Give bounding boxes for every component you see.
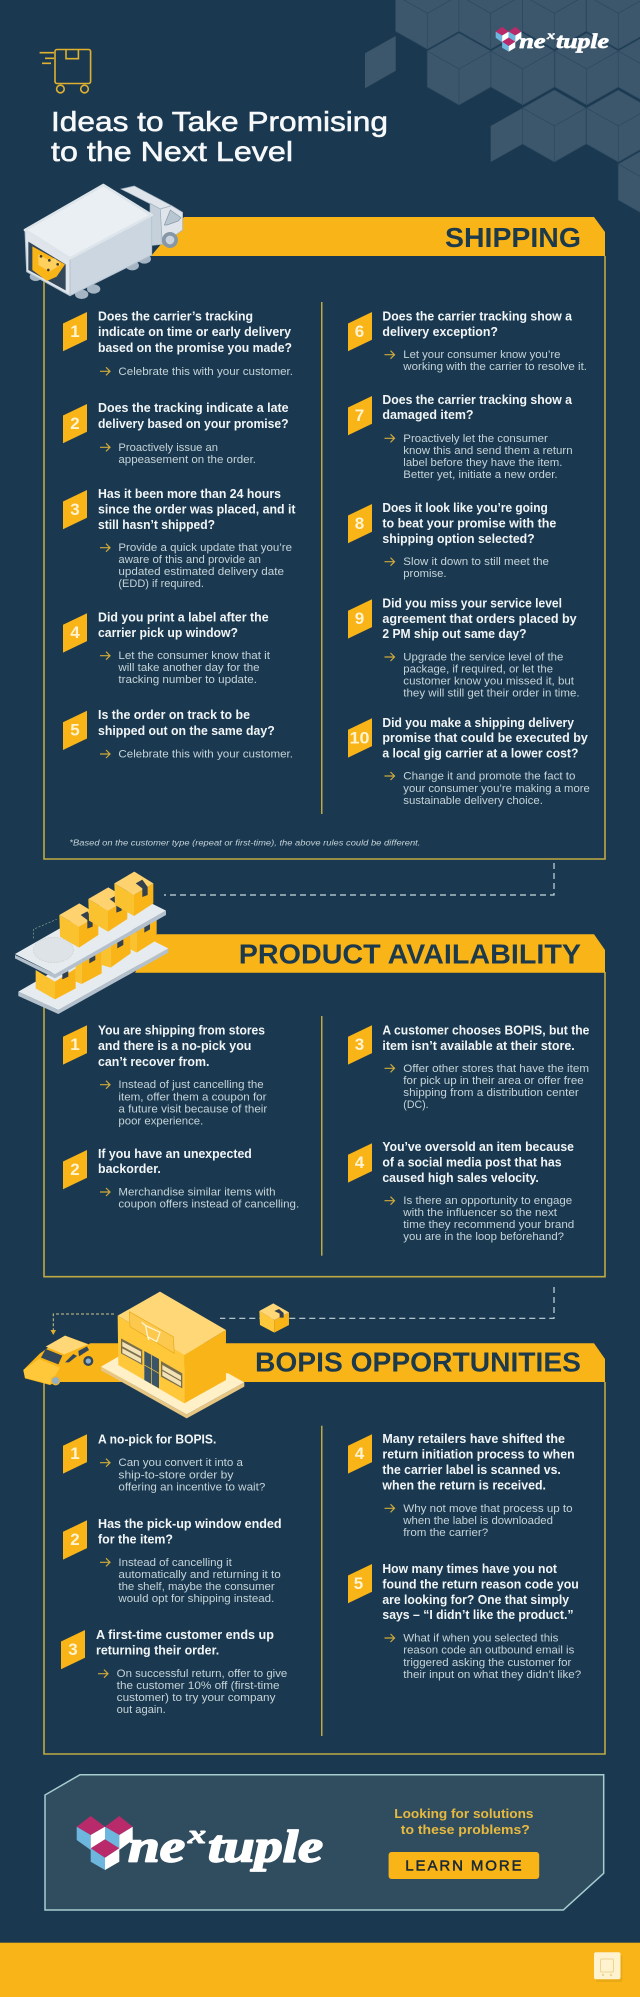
item 3: Has it been more than 24 hours [98,487,281,501]
item 9: they will still get their order in time. [403,688,580,700]
item 4: of a social media post that has [382,1156,562,1170]
item 2 [63,1147,299,1210]
item 1: offering an incentive to wait? [118,1482,265,1494]
item 5: triggered asking the customer for [403,1657,572,1669]
item 5: found the return reason code you [382,1578,579,1592]
panel: product availability [15,872,605,1277]
call to action text [394,1806,534,1837]
item 5: are looking for? One that simply [382,1593,569,1607]
item 4: Did you print a label after the [98,610,269,624]
shipping frame [44,256,605,859]
cube pattern [365,0,640,218]
title: Ideas to Take Promising [51,106,388,137]
item 10: 10 [350,728,370,748]
item 2: automatically and returning it to [118,1569,281,1581]
panel: BOPIS opportunities [23,1292,605,1754]
item 7: label before they have the item. [403,457,562,469]
dashed connector to BOPIS [220,1287,554,1318]
item 3: (DC). [403,1099,429,1111]
item 7: damaged item? [382,408,474,422]
item 3: On successful return, offer to give [117,1668,287,1680]
item 9: package, if required, or let the [403,664,553,676]
BOPIS heading band: BOPIS OPPORTUNITIES [255,1347,581,1378]
item 3: (EDD) if required. [118,578,204,590]
availability heading band: PRODUCT AVAILABILITY [239,938,581,969]
item 3 [63,487,296,590]
item 3: 3 [70,500,80,519]
item 1: and there is a no-pick you [98,1039,251,1053]
item 3: Provide a quick update that you’re [118,542,292,554]
small logo [496,27,609,53]
call to action text: Looking for solutions [394,1806,534,1821]
item 1: item, offer them a coupon for [118,1092,267,1104]
item 9: Upgrade the service level of the [403,652,563,664]
item 5: 5 [354,1574,363,1593]
item 4: You’ve oversold an item because [382,1140,574,1154]
item 6: Let your consumer know you’re [403,349,560,361]
BOPIS heading band [58,1343,605,1382]
item 8: shipping option selected? [382,532,535,546]
item 10: Did you make a shipping delivery [382,716,574,730]
item 2 [63,1517,282,1605]
item 4: time they recommend your brand [403,1219,574,1231]
item 3: updated estimated delivery date [118,566,284,578]
item 4: tracking number to update. [118,674,257,686]
item 5: their input on what they didn’t like? [403,1669,581,1681]
item 2: delivery based on your promise? [98,417,289,431]
item 2: 2 [70,1160,80,1179]
item 4: Let the consumer know that it [118,650,270,662]
item 1: poor experience. [118,1116,203,1128]
item 4: the carrier label is scanned vs. [382,1463,561,1477]
item 3: shipping from a distribution center [403,1087,579,1099]
call to action text: to these problems? [401,1822,530,1837]
availability frame [44,972,605,1277]
item 5 [348,1562,581,1681]
item 2: Does the tracking indicate a late [98,401,289,415]
shipping heading band: SHIPPING [445,222,581,253]
item 2: Instead of cancelling it [118,1557,232,1569]
item 1 [63,1432,265,1494]
item 4 [348,1140,574,1243]
item 3: item isn’t available at their store. [382,1039,575,1053]
item 2: 2 [70,414,80,433]
item 2: coupon offers instead of cancelling. [118,1198,299,1210]
dashed connector to product availability [164,863,554,895]
item 8: 8 [355,514,364,533]
learn more button: LEARN MORE [405,1858,522,1874]
item 7: 7 [355,406,364,425]
item 5: 5 [70,720,80,740]
item 3 [348,1024,589,1111]
item 9: customer know you missed it, but [403,676,574,688]
call to action box [45,1775,604,1910]
item 8: to beat your promise with the [382,516,556,530]
learn more button [389,1852,539,1879]
item 6: delivery exception? [382,325,498,339]
item 6: 6 [355,322,364,341]
item 4: carrier pick up window? [98,626,238,640]
item 3: aware of this and provide an [118,554,261,566]
item 9: 9 [355,609,364,628]
item 7 [348,393,573,481]
item 8: promise. [403,568,446,580]
item 4: caused high sales velocity. [382,1171,539,1185]
item 1: based on the promise you made? [98,341,292,355]
item 10: Change it and promote the fact to [403,770,576,782]
item 3: A first-time customer ends up [96,1628,274,1642]
item 2: 2 [70,1530,80,1549]
item 1: Instead of just cancelling the [118,1079,264,1091]
item 10: your consumer you’re making a more [403,783,590,795]
item 4: 4 [355,1153,365,1172]
item 1: ship-to-store order by [118,1470,234,1482]
item 1 [63,310,293,378]
footer band [0,1943,640,1997]
item 4: Why not move that process up to [403,1503,573,1515]
item 3: out again. [117,1704,166,1716]
item 5: reason code an outbound email is [403,1644,575,1656]
item 1 [63,1024,268,1128]
item 9: agreement that orders placed by [382,612,577,626]
item 5: says – “I didn’t like the product.” [382,1608,574,1622]
item 5: Is the order on track to be [98,708,250,722]
item 10 [348,716,590,807]
item 3: customer) to try your company [117,1692,276,1704]
item 7: Better yet, initiate a new order. [403,469,558,481]
item 1: 1 [70,322,80,341]
item 9 [348,596,580,700]
item 4: when the label is downloaded [402,1515,553,1527]
item 6 [348,310,587,373]
panel: shipping [25,185,605,859]
item 8: Slow it down to still meet the [403,556,549,568]
BOPIS divider [321,1426,322,1736]
item 3: A customer chooses BOPIS, but the [382,1024,589,1038]
item 3 [61,1628,287,1716]
availability heading band [135,934,605,973]
item 5: How many times have you not [382,1562,558,1576]
item 1: can’t recover from. [98,1055,209,1069]
item 10: sustainable delivery choice. [403,795,543,807]
shelf illustration [15,872,168,1014]
shipping divider [321,302,322,814]
item 2 [63,401,289,466]
item 3: for pick up in their area or offer free [403,1075,584,1087]
truck illustration [25,185,183,299]
store and car illustration [23,1292,244,1418]
footnote: *Based on the customer type (repeat or first-time), the above rules could be different. [69,838,420,848]
item 1: You are shipping from stores [98,1024,265,1038]
item 8: Does it look like you’re going [382,501,548,515]
item 1: Celebrate this with your customer. [118,366,293,378]
item 6: Does the carrier tracking show a [382,310,573,324]
icon: small parcel [259,1303,289,1333]
item 3: Offer other stores that have the item [403,1063,589,1075]
item 2: would opt for shipping instead. [117,1593,274,1605]
item 2: backorder. [98,1162,161,1176]
icon: footer badge [594,1952,622,1982]
item 3: 3 [355,1035,364,1054]
item 3: the customer 10% off (first-time [117,1680,280,1692]
item 1: Can you convert it into a [118,1457,243,1469]
item 4: Is there an opportunity to engage [403,1195,572,1207]
item 5: shipped out on the same day? [98,724,275,738]
panel: call to action [45,1775,604,1910]
item 5 [63,708,293,760]
item 3: since the order was placed, and it [98,502,296,516]
BOPIS frame [44,1380,605,1754]
item 7: Proactively let the consumer [403,433,548,445]
item 9: Did you miss your service level [382,596,562,610]
title: to the Next Level [51,136,293,167]
item 4: when the return is received. [381,1478,546,1492]
item 4: from the carrier? [403,1527,488,1539]
item 4: return initiation process to when [382,1448,575,1462]
item 7: Does the carrier tracking show a [382,393,573,407]
dashed connector store to car [50,1314,114,1335]
item 2: for the item? [98,1532,173,1546]
item 1: indicate on time or early delivery [98,325,291,339]
item 2: Merchandise similar items with [118,1186,276,1198]
item 8 [348,501,556,580]
item 1: A no-pick for BOPIS. [98,1432,216,1446]
item 3: returning their order. [96,1644,219,1658]
item 10: promise that could be executed by [382,731,588,745]
icon: parcel on wheels [40,50,91,93]
item 1: a future visit because of their [118,1104,268,1116]
item 2: appeasement on the order. [118,454,256,466]
item 4 [63,610,270,686]
item 4: with the influencer so the next [402,1207,557,1219]
item 4: Many retailers have shifted the [382,1432,565,1446]
item 10: a local gig carrier at a lower cost? [382,746,578,760]
item 2: If you have an unexpected [98,1147,252,1161]
item 3: still hasn’t shipped? [98,518,215,532]
item 2: the shelf, maybe the consumer [118,1581,275,1593]
shipping heading band [151,217,605,256]
item 1: 1 [70,1035,80,1054]
availability divider [321,1016,322,1256]
item 4 [348,1432,575,1539]
title [51,106,388,167]
item 5: Celebrate this with your customer. [118,748,293,760]
item 1: Does the carrier’s tracking [98,310,253,324]
item 2: Has the pick-up window ended [98,1517,282,1531]
item 5: What if when you selected this [403,1632,559,1644]
item 4: 4 [70,623,80,642]
large logo [77,1816,323,1872]
item 2: Proactively issue an [118,442,218,454]
item 1: 1 [70,1444,80,1463]
item 7: know this and send them a return [403,445,573,457]
item 9: 2 PM ship out same day? [382,627,526,641]
item 3: 3 [68,1640,78,1659]
item 4: you are in the loop beforehand? [403,1231,564,1243]
item 4: 4 [355,1444,365,1463]
item 6: working with the carrier to resolve it. [402,361,587,373]
item 4: will take another day for the [117,662,260,674]
